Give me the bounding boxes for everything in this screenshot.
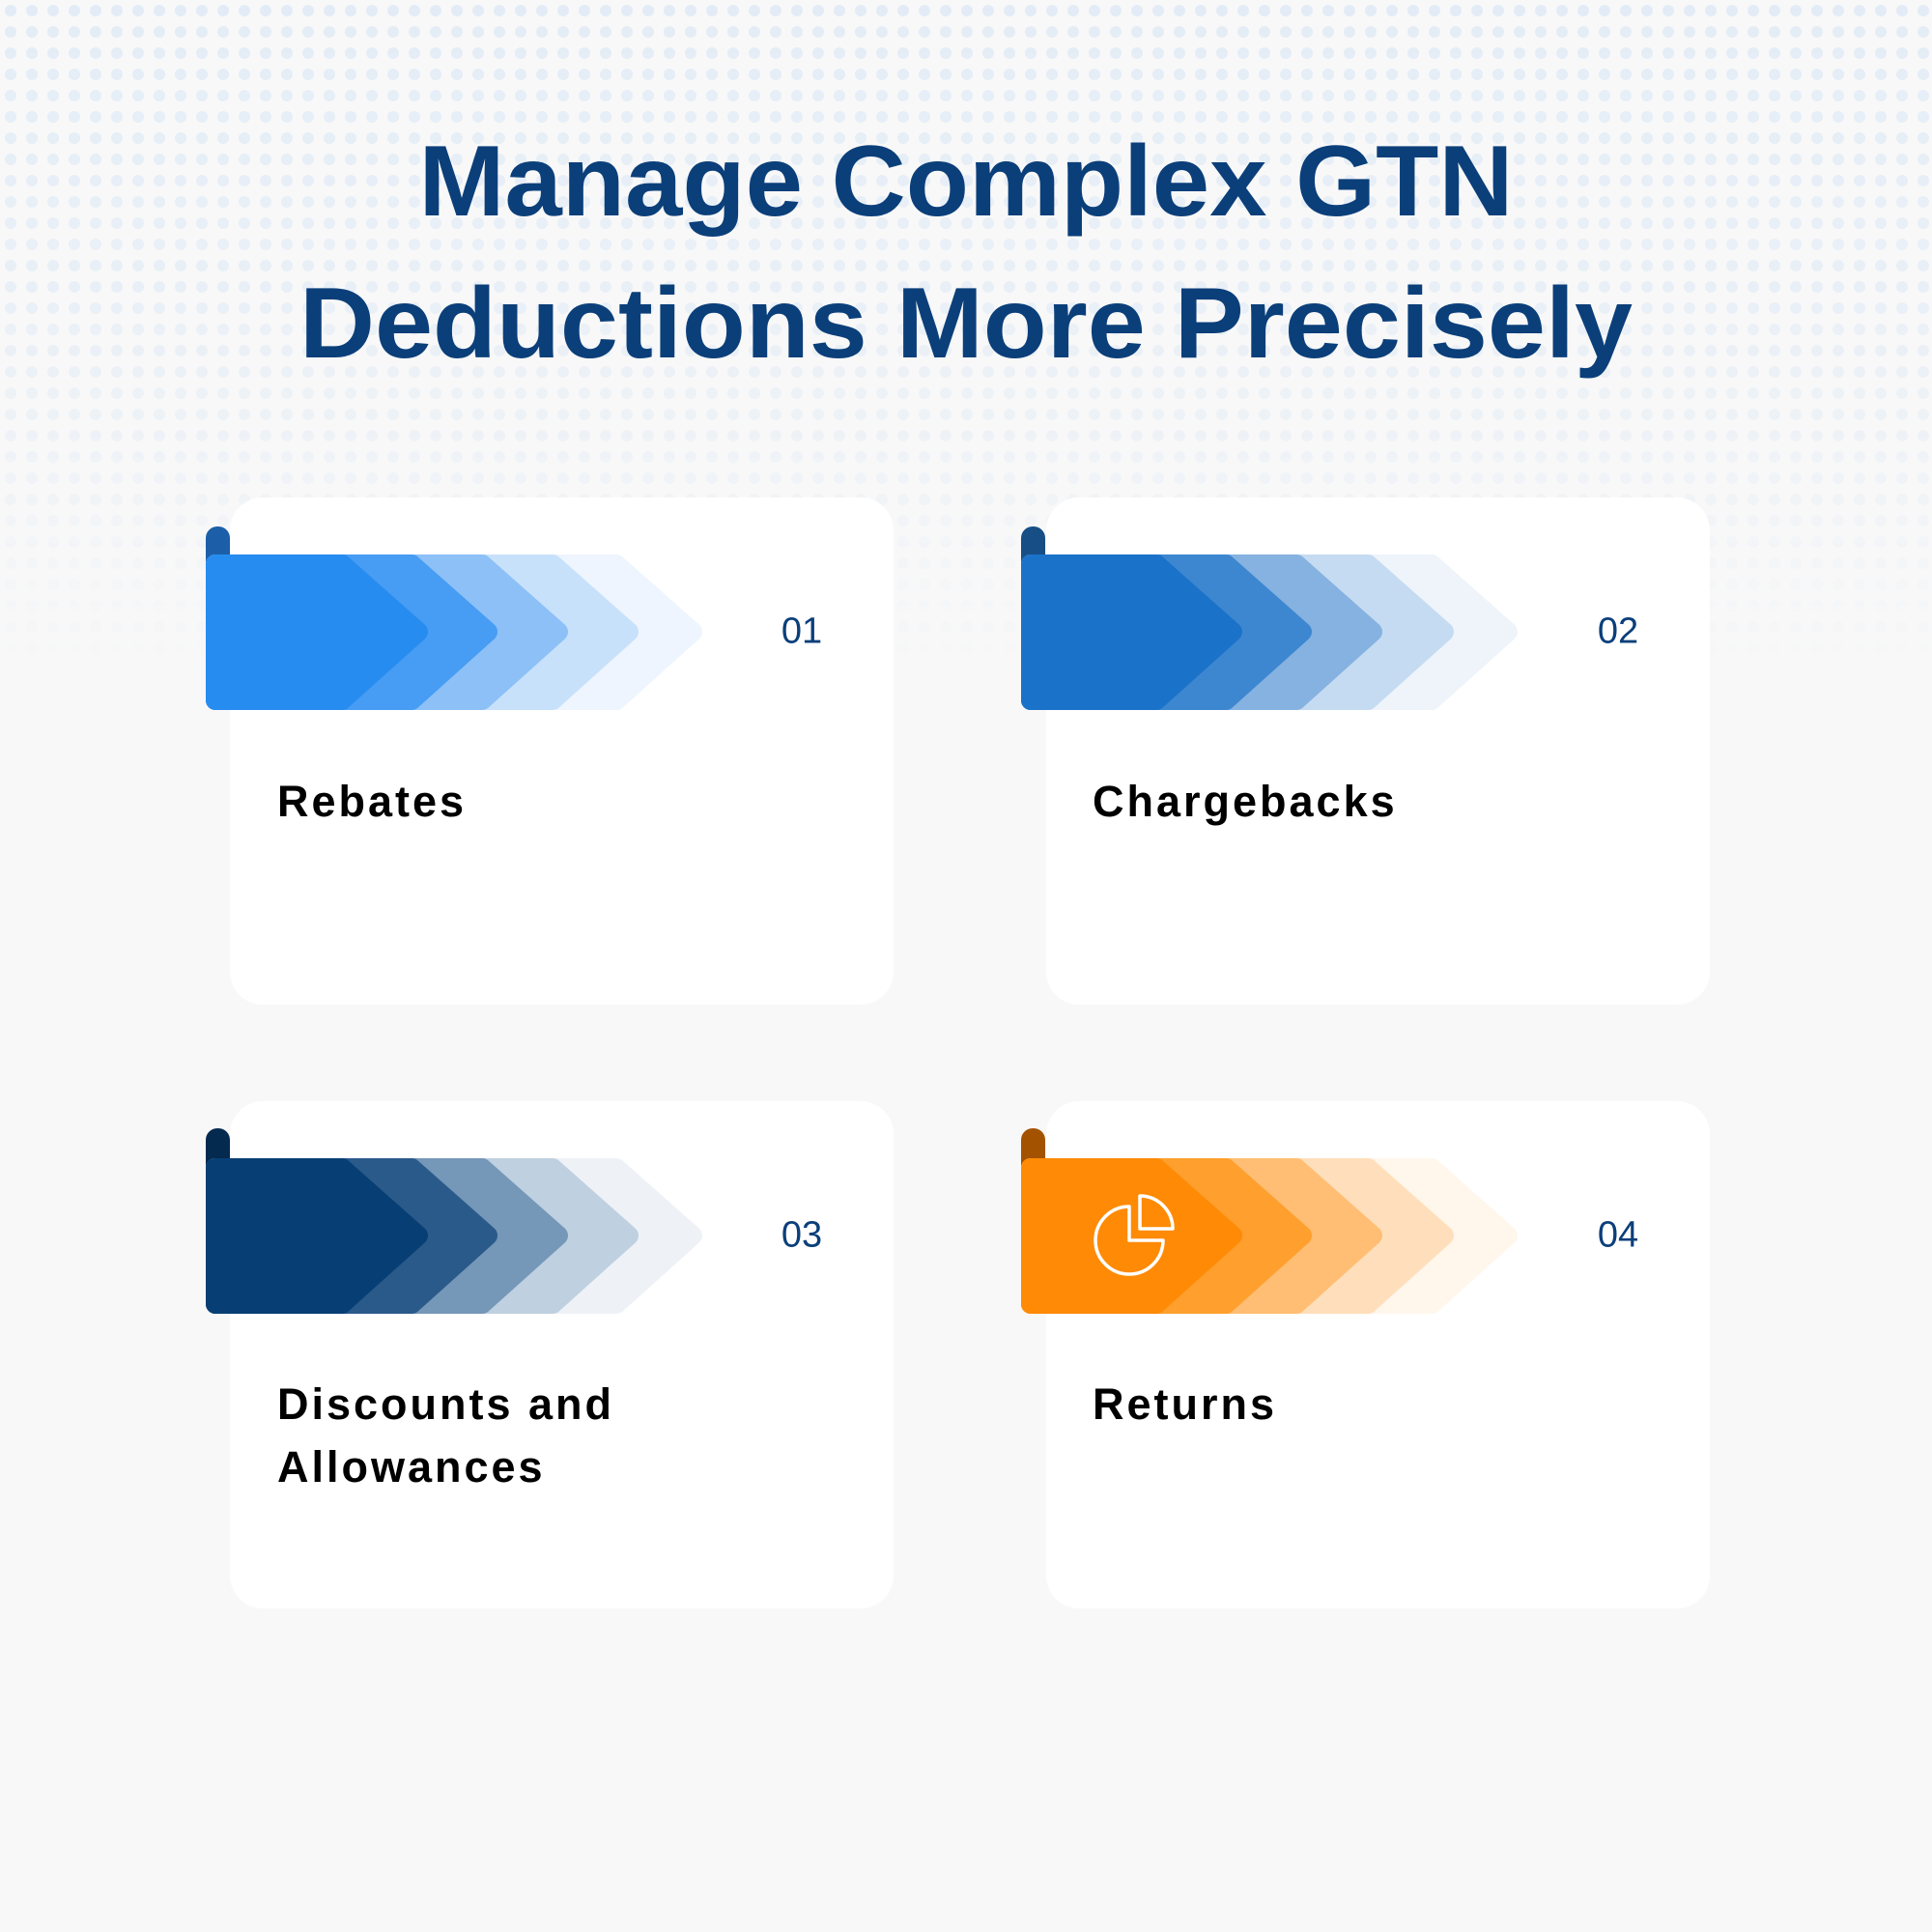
number 01: 01 [781, 611, 822, 651]
panel: discounts and allowances [206, 1128, 822, 1492]
label: Discounts and Allowances: Allowances [277, 1442, 546, 1492]
number 02: 02 [1598, 611, 1638, 651]
panel: returns [1021, 1128, 1638, 1429]
icon: pie chart [1095, 1196, 1173, 1274]
ribbon: chargebacks [1021, 526, 1518, 710]
label: Returns: Returns [1093, 1379, 1277, 1429]
label: Discounts and Allowances: Discounts and [277, 1379, 614, 1429]
number 03: 03 [781, 1215, 822, 1256]
ribbon: discounts [206, 1128, 702, 1314]
panel: rebates [206, 497, 888, 826]
number 04: 04 [1598, 1215, 1638, 1256]
title [299, 126, 1633, 380]
label: Rebates: Rebates [277, 777, 467, 826]
ribbon: rebates [206, 526, 702, 710]
label: Discounts and Allowances [277, 1379, 614, 1492]
title: Manage Complex GTN [419, 126, 1513, 238]
label: Chargebacks: Chargebacks [1093, 777, 1398, 826]
title: Deductions More Precisely [299, 268, 1633, 380]
panel: chargebacks [1021, 497, 1710, 826]
background dot pattern [5, 5, 1929, 475]
ribbon: returns [1021, 1128, 1518, 1314]
